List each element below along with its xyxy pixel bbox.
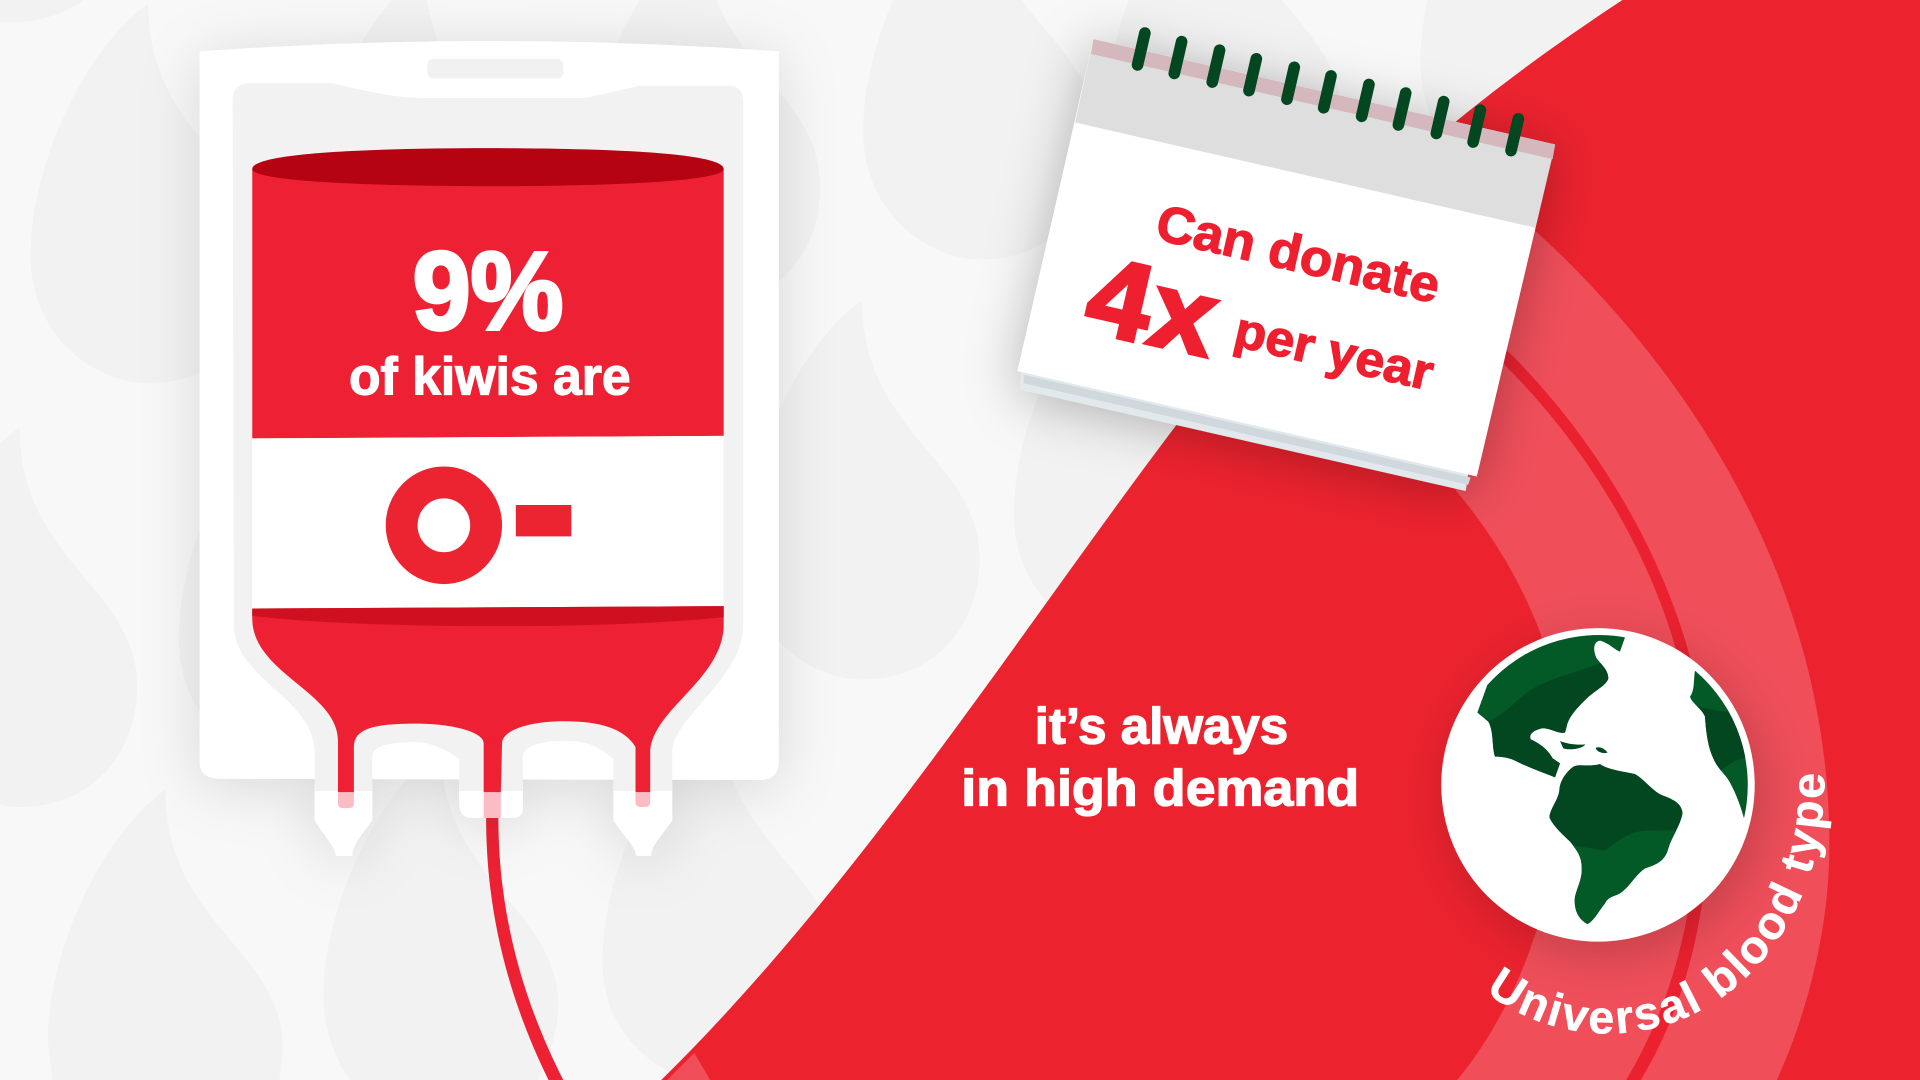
bag shell — [200, 41, 779, 856]
hanging slot — [427, 59, 563, 78]
red background shape — [661, 0, 1920, 1080]
blood upper fill — [252, 169, 724, 438]
stat: 4x: x — [1140, 247, 1229, 380]
calendar — [1018, 33, 1555, 491]
blood type O- — [386, 390, 576, 616]
blood bag — [200, 41, 779, 856]
text: Universal blood type: Universal blood type — [1491, 774, 1832, 1034]
text: of kiwis are: of kiwis are — [349, 347, 631, 406]
blood type O-: O — [386, 448, 503, 607]
text: it's always in high demand: it’s always — [1035, 696, 1288, 754]
blood surface — [252, 148, 724, 186]
text: Can donate: Can donate — [1151, 193, 1446, 314]
binding strip — [1091, 39, 1555, 159]
blood lower fill — [252, 606, 724, 792]
stat: 4x — [1076, 233, 1229, 380]
label band — [252, 436, 724, 609]
north america — [1477, 635, 1625, 778]
lower fill shade — [252, 606, 724, 626]
spiral rings — [1138, 33, 1518, 151]
africa — [1690, 670, 1748, 818]
blood tube — [486, 818, 563, 1080]
light red ring band — [667, 211, 1829, 1080]
calendar header — [1075, 39, 1555, 228]
globe — [1441, 627, 1755, 942]
page front — [1018, 122, 1536, 476]
south america — [1549, 764, 1683, 924]
caribbean islands — [1560, 741, 1608, 753]
tube windows — [338, 792, 650, 818]
text: per year: per year — [1229, 301, 1439, 401]
text: it's always in high demand — [961, 696, 1359, 817]
globe disc — [1441, 628, 1755, 942]
calendar page stack and body — [1018, 39, 1555, 491]
stat: 4x: 4 — [1076, 233, 1165, 367]
continents — [1467, 627, 1753, 930]
stat: 9%: 9% — [413, 230, 563, 353]
stack edge — [1024, 375, 1471, 485]
bag inner sleeve — [233, 83, 743, 791]
blood type O-: - — [512, 390, 576, 616]
text: it's always in high demand: in high demand — [961, 759, 1359, 817]
